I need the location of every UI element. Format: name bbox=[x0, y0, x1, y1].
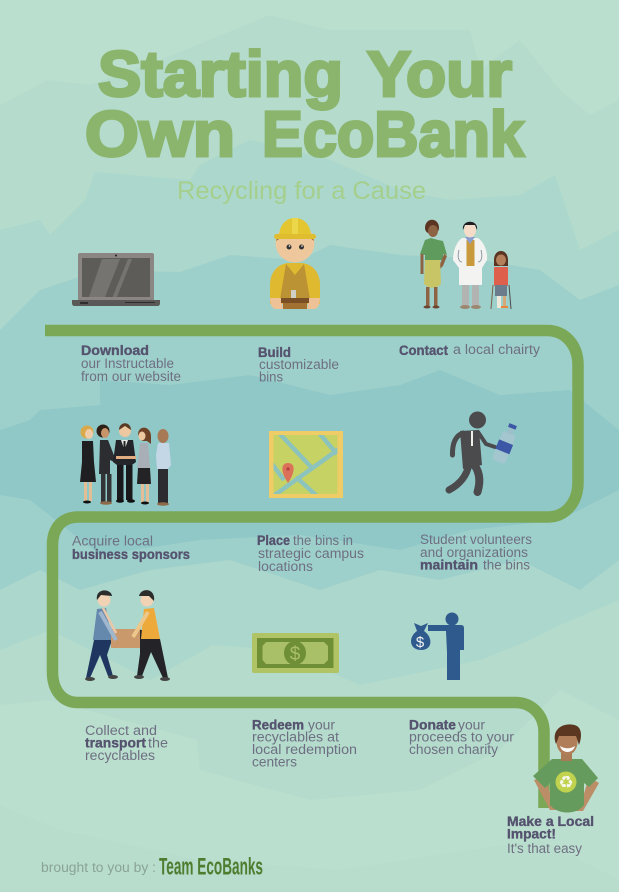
step text: download bbox=[81, 342, 181, 384]
icon: map with pin bbox=[269, 431, 343, 498]
step text: place: Place bbox=[257, 532, 290, 548]
icon: walking person with bottle bbox=[449, 412, 520, 492]
step text: contact: a local chairty bbox=[453, 342, 540, 357]
step text: maintain: maintain bbox=[420, 556, 478, 572]
step text: place: strategic campus bbox=[258, 546, 364, 561]
step text: transport: transport bbox=[85, 734, 146, 750]
icon: business people bbox=[80, 423, 171, 506]
step text: maintain: Student volunteers bbox=[420, 532, 532, 547]
title: Your bbox=[367, 38, 512, 110]
icon: family and doctor bbox=[420, 220, 511, 309]
step text: download: Download bbox=[81, 342, 149, 358]
icon: smiling man in recycling shirt bbox=[533, 724, 599, 812]
step text: donate: chosen charity bbox=[409, 742, 498, 757]
title: EcoBank bbox=[262, 98, 524, 170]
step text: maintain: the bins bbox=[483, 558, 530, 572]
winding path bbox=[45, 330, 578, 808]
step text: build: customizable bbox=[259, 357, 339, 372]
closing text: make a local impact: Impact! bbox=[507, 826, 556, 842]
step text: transport bbox=[85, 723, 168, 763]
step text: redeem: local redemption bbox=[252, 742, 357, 757]
icon: person holding money bag bbox=[411, 612, 464, 680]
step text: redeem bbox=[252, 716, 357, 770]
closing text: make a local impact bbox=[507, 813, 594, 856]
step text: place: locations bbox=[258, 559, 313, 574]
credit bbox=[41, 854, 263, 880]
step text: redeem: centers bbox=[252, 754, 297, 770]
closing text: make a local impact: It's that easy bbox=[507, 841, 582, 856]
step text: download: our Instructable bbox=[81, 356, 174, 371]
step text: build: bins bbox=[259, 370, 283, 384]
icon: person holding money bag: $ bbox=[416, 634, 425, 651]
credit: Team EcoBanks bbox=[159, 854, 263, 880]
title bbox=[85, 38, 524, 170]
step text: build bbox=[258, 344, 339, 384]
icon: laptop bbox=[72, 253, 160, 306]
icon: smiling man in recycling shirt: ♻ bbox=[558, 773, 574, 793]
step text: donate bbox=[409, 716, 515, 757]
icon: dollar bill bbox=[252, 633, 339, 673]
icon: two men carrying box bbox=[85, 590, 170, 681]
closing text: make a local impact: Make a Local bbox=[507, 813, 594, 829]
title: Own bbox=[85, 98, 235, 170]
step text: sponsors: business sponsors bbox=[72, 546, 190, 562]
step text: redeem: Redeem bbox=[252, 716, 304, 732]
icon: construction worker bbox=[270, 218, 320, 309]
step text: download: from our website bbox=[81, 369, 181, 384]
step text: place: the bins in bbox=[293, 533, 353, 548]
step text: sponsors bbox=[72, 534, 190, 562]
step text: contact bbox=[399, 342, 540, 358]
icon: dollar bill: $ bbox=[290, 644, 301, 665]
step text: redeem: recyclables at bbox=[252, 730, 339, 744]
step text: donate: proceeds to your bbox=[409, 730, 515, 744]
step text: maintain: and organizations bbox=[420, 545, 528, 560]
subtitle: Recycling for a Cause bbox=[177, 177, 426, 205]
step text: transport: the bbox=[148, 736, 168, 750]
step text: maintain bbox=[420, 532, 532, 572]
step text: place bbox=[257, 532, 364, 574]
step text: donate: your bbox=[458, 718, 486, 732]
credit: brought to you by : bbox=[41, 860, 156, 875]
step text: transport: Collect and bbox=[85, 723, 157, 738]
step text: contact: Contact bbox=[399, 342, 448, 358]
step text: sponsors: Acquire local bbox=[72, 534, 153, 548]
title: Starting bbox=[98, 38, 343, 110]
step text: build: Build bbox=[258, 344, 291, 360]
step text: donate: Donate bbox=[409, 716, 456, 732]
step text: redeem: your bbox=[308, 718, 336, 732]
step text: transport: recyclables bbox=[85, 748, 155, 763]
